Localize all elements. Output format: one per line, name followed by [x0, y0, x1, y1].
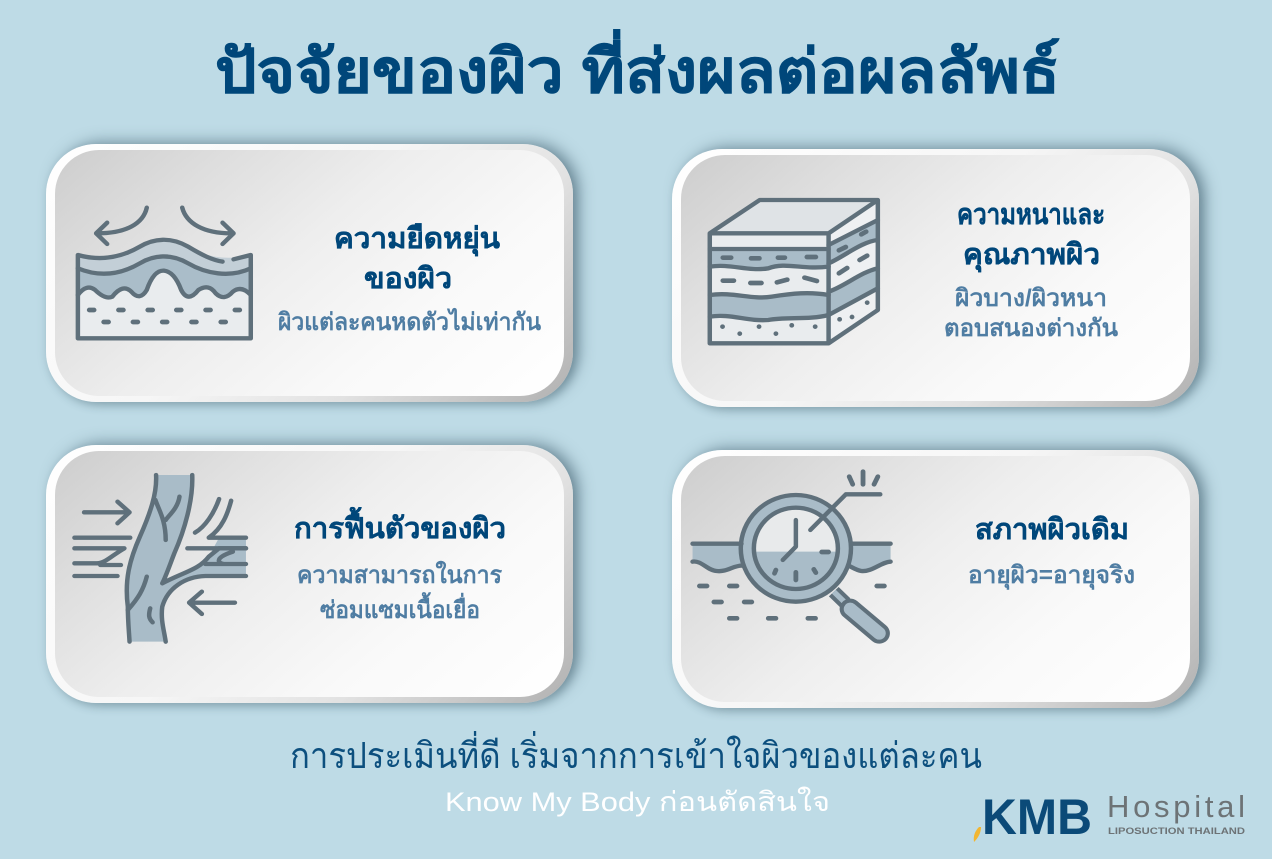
text: existing skin condition: อายุผิว=อายุจริง	[968, 562, 1135, 591]
panel: skin recovery card	[46, 445, 573, 703]
icon: tissue repair	[74, 475, 246, 642]
text: elasticity: ผิวแต่ละคนหดตัวไม่เท่ากัน	[278, 307, 542, 336]
text: thickness and quality: ผิวบาง/ผิวหนา	[955, 285, 1107, 312]
text: thickness and quality: คุณภาพผิว	[963, 239, 1100, 272]
text: recovery: ซ่อมแซมเนื้อเยื่อ	[320, 591, 480, 624]
icon: layered skin cube	[710, 200, 878, 343]
text: thickness and quality: ความหนาและ	[957, 199, 1105, 231]
panel: skin elasticity card	[46, 144, 573, 402]
logo: KMB Hospital: LIPOSUCTION THAILAND	[1108, 826, 1245, 837]
logo: KMB Hospital: Hospital	[1107, 789, 1245, 824]
text: elasticity: ความยืดหยุ่น	[334, 223, 500, 256]
text: existing skin condition	[968, 514, 1135, 591]
text: elasticity	[278, 223, 542, 336]
icon: stretching skin layers	[78, 208, 251, 338]
text: elasticity: ของผิว	[364, 263, 452, 295]
tagline: Know My Body ก่อนตัดสินใจ	[445, 786, 830, 817]
text: recovery: การฟื้นตัวของผิว	[294, 506, 506, 545]
title: ปัจจัยของผิว ที่ส่งผลต่อผลลัพธ์	[215, 29, 1060, 105]
panel: skin thickness card	[672, 149, 1199, 407]
logo: KMB Hospital: KMB	[982, 789, 1092, 845]
text: recovery: ความสามารถในการ	[297, 560, 502, 589]
closing statement: การประเมินที่ดี เริ่มจากการเข้าใจผิวของแต่ละคน	[290, 731, 982, 776]
text: thickness and quality: ตอบสนองต่างกัน	[944, 315, 1119, 342]
text: recovery	[294, 506, 506, 624]
text: thickness and quality	[944, 199, 1119, 342]
logo: KMB Hospital	[974, 789, 1245, 845]
text: existing skin condition: สภาพผิวเดิม	[975, 514, 1129, 546]
panel: existing skin condition card	[672, 450, 1199, 708]
icon: magnifier with clock over skin	[693, 472, 891, 633]
